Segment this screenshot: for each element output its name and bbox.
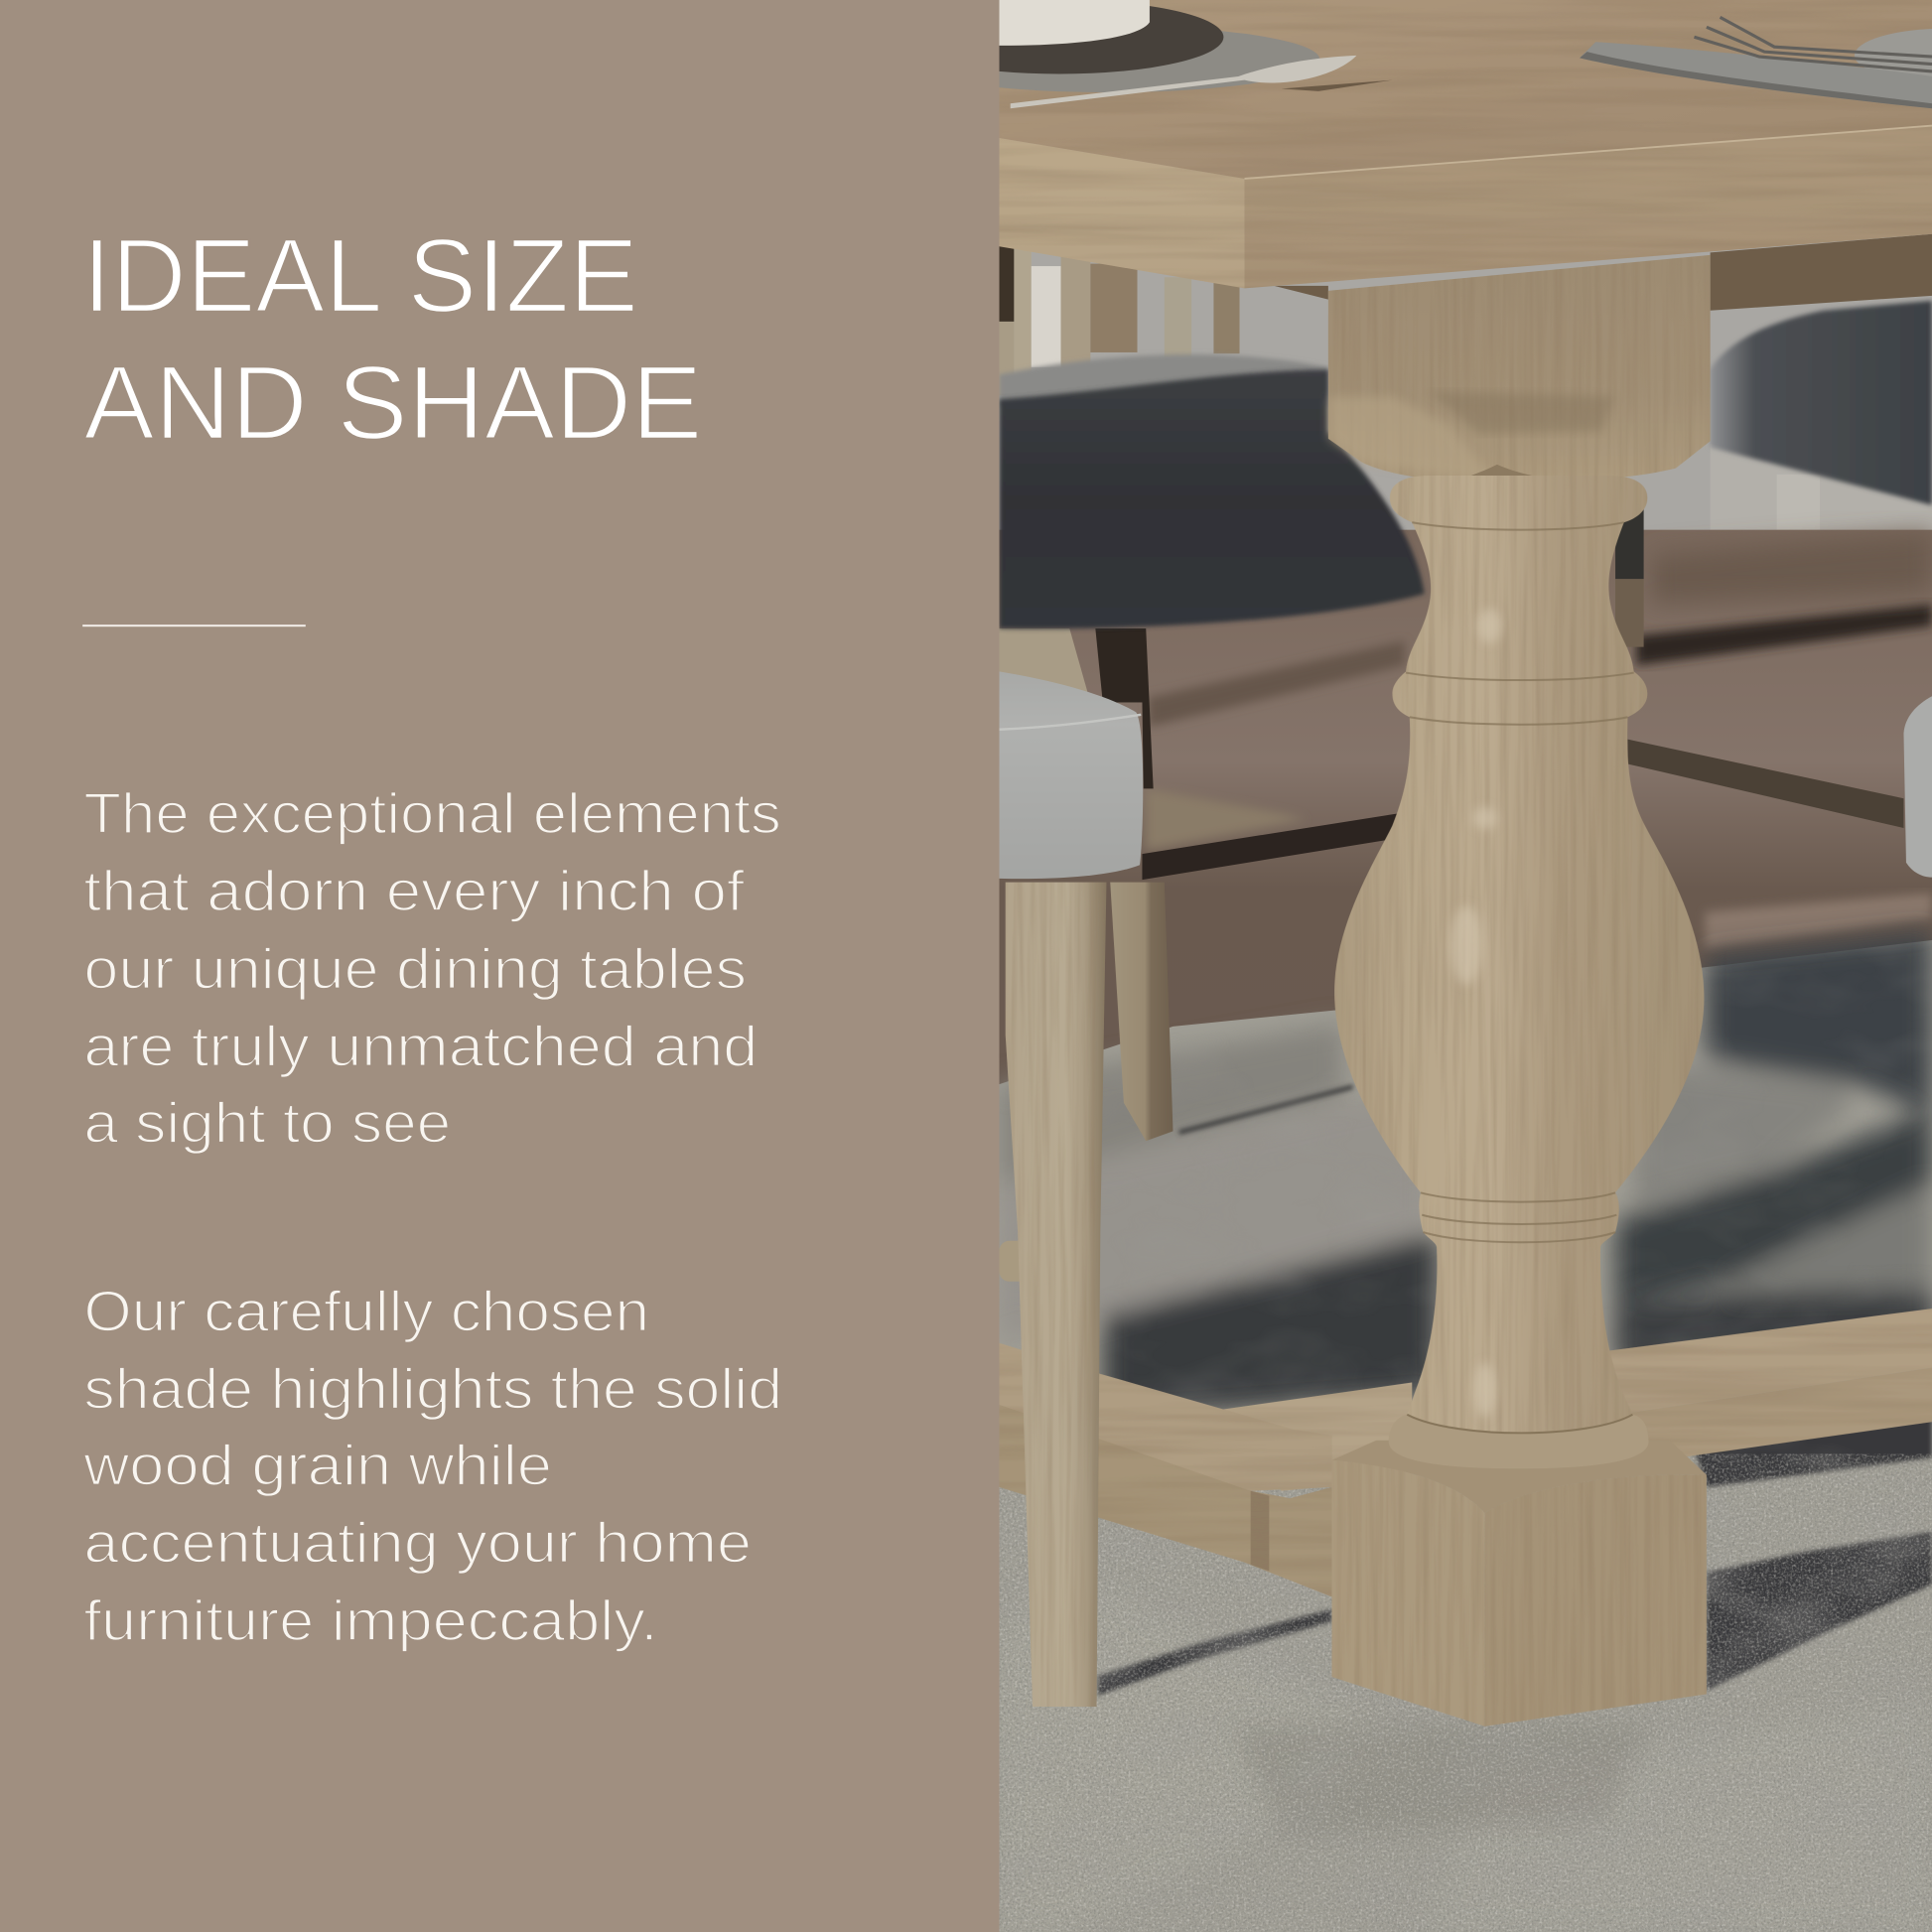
- table edge left face: [1000, 138, 1244, 288]
- place setting left: [896, 0, 1392, 108]
- rug top shadow line: [1179, 1084, 1353, 1135]
- far placemat: [1855, 29, 1932, 82]
- floor shadow patches: [1146, 532, 1932, 949]
- spoon: [1011, 56, 1356, 108]
- rug: [1000, 930, 1932, 1932]
- plate: [896, 0, 1223, 73]
- text block: carefully chosen shade paragraph: Our carefully chosen: [83, 1280, 649, 1343]
- left beam: [1000, 1343, 1332, 1596]
- rug mottling and pile texture: [1000, 936, 1932, 1932]
- block sunlit patch: [1328, 397, 1497, 483]
- text block: exceptional elements paragraph: [83, 782, 781, 1155]
- small chair rung: [999, 1241, 1019, 1281]
- fork and knife: [1694, 17, 1932, 71]
- base ring: [1389, 1415, 1649, 1468]
- panel: dining table photo illustration: [896, 0, 1932, 1932]
- back wall and slats: [1000, 234, 1932, 554]
- text block: exceptional elements paragraph: are truly unmatched and: [83, 1016, 758, 1079]
- stretcher beams: [1000, 1309, 1932, 1596]
- column highlights: [1450, 609, 1502, 1417]
- pedestal top block: [1328, 255, 1711, 485]
- block chamfer edge: [1448, 465, 1589, 485]
- foot left face: [1332, 1460, 1484, 1726]
- dark chair seat right: [1711, 301, 1932, 505]
- text block: exceptional elements paragraph: a sight to see: [83, 1091, 451, 1155]
- heading: ideal size and shade: AND SHADE: [83, 345, 702, 462]
- right grey chair cushion: [1903, 696, 1932, 878]
- panel: text background: [0, 0, 1000, 1932]
- table edge right face: [1244, 126, 1932, 288]
- text block: carefully chosen shade paragraph: shade highlights the solid: [83, 1358, 782, 1422]
- bowl: [1000, 0, 1150, 46]
- napkin: [1580, 42, 1932, 108]
- pedestal foot block: [1332, 1415, 1707, 1726]
- table underside apron: [1711, 234, 1932, 311]
- foot top: [1332, 1441, 1707, 1513]
- heading: ideal size and shade: [82, 218, 702, 462]
- front chair leg: [1006, 883, 1106, 1707]
- text block: carefully chosen shade paragraph: furniture impeccably.: [83, 1589, 658, 1653]
- text block: exceptional elements paragraph: our unique dining tables: [83, 937, 747, 1001]
- dark chair seat left: [1000, 354, 1425, 628]
- turned pedestal column: [1334, 476, 1704, 1468]
- text block: exceptional elements paragraph: The exceptional elements: [83, 782, 781, 846]
- text block: carefully chosen shade paragraph: accentuating your home: [83, 1512, 752, 1576]
- foot right face: [1484, 1474, 1707, 1726]
- rear chair stretchers: [1142, 740, 1903, 880]
- front grey chair cushion: [1000, 671, 1143, 879]
- place setting right: [1580, 17, 1932, 108]
- table top surface: [1000, 0, 1932, 179]
- far chair leg behind pedestal: [1615, 499, 1644, 647]
- text block: carefully chosen shade paragraph: wood grain while: [82, 1434, 552, 1497]
- rug tonal patches: [1000, 930, 1932, 1932]
- heading: ideal size and shade: IDEAL SIZE: [82, 218, 638, 335]
- table edge highlight: [1244, 126, 1932, 179]
- divider rule: [82, 624, 306, 626]
- rug cast shadows under base: [1098, 1392, 1932, 1696]
- right beam: [1221, 1309, 1932, 1491]
- rear chair leg: [1000, 628, 1173, 1141]
- ring grooves: [1406, 522, 1634, 1242]
- floor: [1000, 530, 1932, 1109]
- text block: exceptional elements paragraph: that adorn every inch of: [83, 860, 745, 923]
- text block: carefully chosen shade paragraph: [82, 1280, 782, 1653]
- placemat: [898, 26, 1319, 92]
- block shadow band: [1430, 392, 1614, 434]
